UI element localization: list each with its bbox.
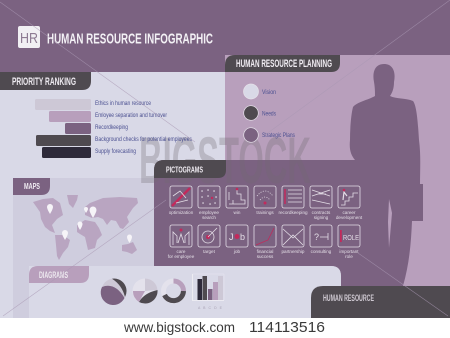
pictogram captions <box>168 210 363 259</box>
heading: human resource planning <box>225 55 340 72</box>
chart: world map <box>33 195 138 260</box>
text block: priority ranking labels: Emloyee separation and turnover <box>95 113 167 119</box>
text block: priority ranking labels: Ethics in human resource <box>95 101 152 107</box>
icon: HR logo <box>18 26 40 48</box>
panel: light background <box>0 72 340 318</box>
chart: bar chart: A B C D E <box>198 306 223 310</box>
text block: planning labels: Needs <box>262 112 276 118</box>
title: HUMAN RESOURCE INFOGRAPHIC <box>47 30 213 48</box>
heading: diagrams: DIAGRAMS <box>39 270 68 280</box>
panel: pink right background <box>225 55 450 318</box>
footer: human resource: HUMAN RESOURCE <box>323 293 374 303</box>
panel: pictograms background <box>154 160 365 286</box>
pictogram captions: signing <box>314 215 329 220</box>
chart: pie 2 <box>132 278 158 304</box>
panel: diagrams background <box>29 266 341 318</box>
pictogram captions: optimization <box>169 210 194 215</box>
chart: planning circles <box>244 84 258 142</box>
panel: header band <box>0 0 450 72</box>
footer: human resource <box>311 286 450 318</box>
heading: pictograms: PICTOGRAMS <box>166 166 203 174</box>
pictogram captions: important <box>339 249 359 254</box>
heading: maps <box>13 178 50 195</box>
text block: priority ranking labels: Background checks for potential employees <box>95 137 192 143</box>
watermark url: www.bigstock.com <box>123 319 235 335</box>
pictogram captions: search <box>202 215 216 220</box>
pictogram icon text glyphs <box>229 230 359 242</box>
pictogram captions: partnership <box>282 249 305 254</box>
icon: HR logo: HR <box>20 30 38 47</box>
pictogram captions: contracts <box>312 210 331 215</box>
heading: priority ranking: PRIORITY RANKING <box>12 76 76 88</box>
text block: priority ranking labels <box>95 101 192 155</box>
pictogram captions: target <box>203 249 216 254</box>
panel: maps background <box>13 178 154 318</box>
heading: priority ranking <box>0 72 91 90</box>
chart: donut <box>164 281 184 301</box>
heading: human resource planning: HUMAN RESOURCE PLANNING <box>236 58 332 70</box>
pictogram captions: trainings <box>256 210 274 215</box>
icon: map pins <box>47 204 132 243</box>
pictogram captions: win <box>234 210 241 215</box>
pictogram icon tiles <box>170 186 360 247</box>
text block: planning labels <box>262 90 295 139</box>
chart: priority ranking bars <box>35 99 91 158</box>
text block: priority ranking labels: Supply forecasting <box>95 149 136 155</box>
text block: planning labels: Strategic Plans <box>262 133 295 139</box>
pictogram captions: role <box>345 254 353 259</box>
pictogram captions: for employee <box>168 254 195 259</box>
heading: pictograms <box>154 160 226 178</box>
pictogram icon text glyphs: J <box>229 232 234 242</box>
heading: diagrams <box>29 266 89 283</box>
chart: bar chart <box>192 274 224 310</box>
pictogram icon text glyphs: b <box>240 232 245 242</box>
pictogram captions: development <box>336 215 363 220</box>
watermark image number: 114113516 <box>249 319 325 336</box>
silhouette: businessman <box>350 64 423 286</box>
pictogram captions: consulting <box>311 249 332 254</box>
pictogram captions: employee <box>199 210 219 215</box>
pictogram captions: recordkeeping <box>278 210 308 215</box>
pictogram captions: career <box>342 210 356 215</box>
pictogram captions: job <box>233 249 241 254</box>
pictogram icon text glyphs: ROLE <box>343 233 359 242</box>
pictogram icon text glyphs: ? <box>314 232 319 242</box>
chart: pie 1 <box>101 278 127 305</box>
heading: maps: MAPS <box>24 182 40 191</box>
pictogram captions: financial <box>257 249 273 254</box>
text block: priority ranking labels: Recordkeeping <box>95 125 128 131</box>
pictogram captions: care <box>177 249 186 254</box>
text block: planning labels: Vision <box>262 90 276 96</box>
pictogram captions: success <box>257 254 274 259</box>
